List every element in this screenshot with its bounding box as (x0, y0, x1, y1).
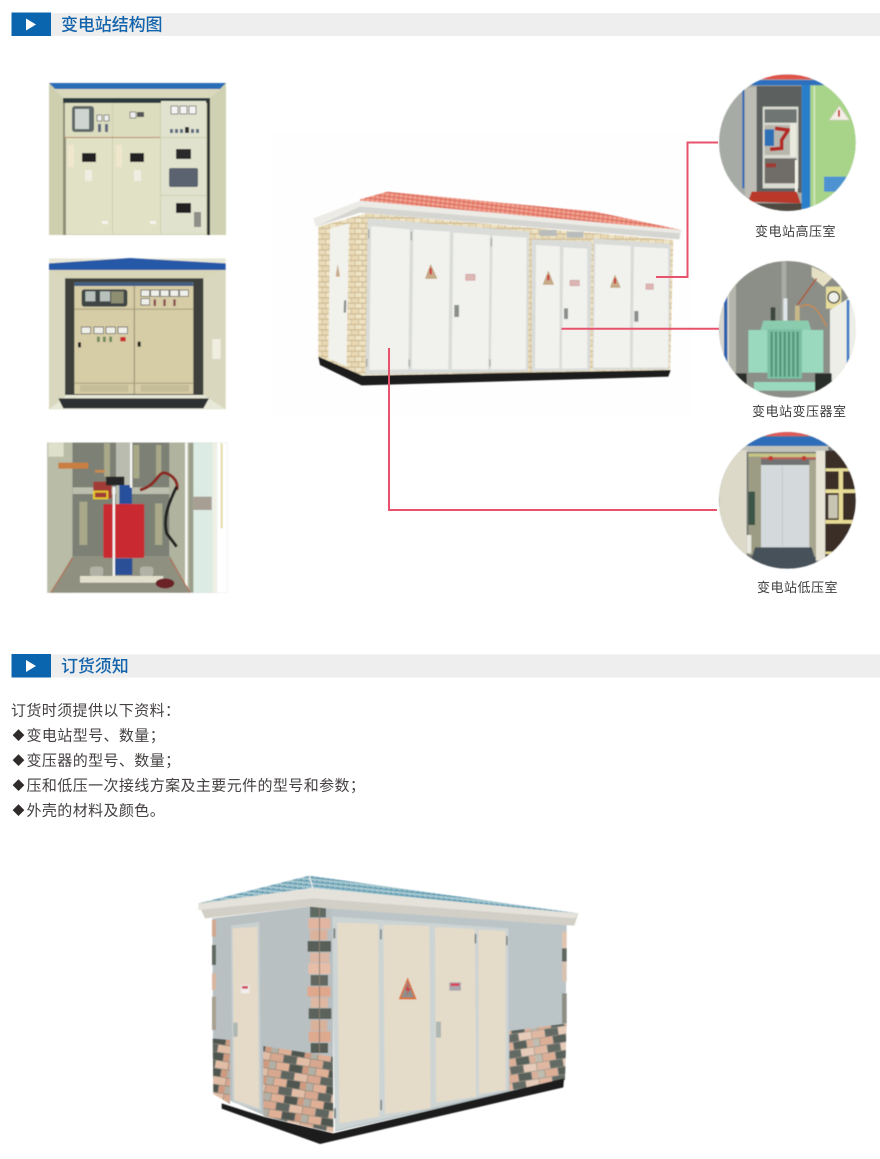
door group C (593, 238, 671, 370)
icon: high voltage warning triangle (399, 977, 417, 999)
text block: ordering requirements: 压和低压一次接线方案及主要元件的型号和参数； (26, 776, 365, 794)
left wall (212, 907, 333, 1132)
roof tiles (198, 876, 578, 913)
leader line: low voltage room (389, 348, 717, 510)
stone corner quoins (212, 907, 567, 1053)
text block: ordering requirements (11, 702, 365, 820)
circle photo: low voltage room (713, 430, 863, 570)
illustration: substation with blue roof and stone corners (198, 876, 578, 1144)
text block: ordering requirements: ◆ (12, 754, 25, 768)
front wall (332, 908, 567, 1132)
section header: ordering notes (12, 654, 880, 678)
door handles (454, 305, 638, 322)
circle photo: high voltage room (713, 73, 863, 213)
leader line: transformer room (562, 328, 719, 330)
roof tiles (360, 192, 682, 230)
door label (449, 982, 461, 991)
door group A (366, 218, 529, 374)
backdrop: faint photo background (272, 132, 692, 417)
icon: warning triangles (426, 265, 620, 287)
text block: ordering requirements: 外壳的材料及颜色。 (26, 802, 165, 820)
icon: header play marker (12, 12, 51, 36)
front wall (365, 213, 673, 375)
concrete base (318, 357, 671, 385)
roof fascia (198, 888, 578, 926)
heading: structure diagram: 变电站结构图 (61, 14, 162, 34)
text block: ordering requirements: ◆ (12, 728, 25, 742)
left wall (318, 213, 367, 376)
leader line: high voltage room (656, 142, 718, 277)
section header: structure diagram (12, 12, 880, 36)
text block: ordering requirements: 订货时须提供以下资料： (11, 702, 180, 720)
left side door (231, 922, 261, 1111)
circle photo: transformer room (713, 260, 863, 400)
roof eave (313, 201, 682, 239)
icon: header play marker (12, 654, 51, 678)
photo: low voltage distribution cabinet (49, 258, 226, 409)
caption: high voltage room: 变电站高压室 (755, 224, 836, 239)
photo: cast resin transformer room (47, 443, 227, 593)
caption: transformer room: 变电站变压器室 (752, 404, 847, 419)
text block: ordering requirements: 变压器的型号、数量； (26, 752, 181, 770)
text block: ordering requirements: ◆ (12, 804, 25, 818)
illustration: substation with red tiled roof (313, 192, 682, 385)
photo: high voltage switchgear cabinet (49, 83, 226, 235)
heading: ordering notes: 订货须知 (61, 657, 129, 676)
door group B (532, 230, 592, 372)
door hinges (366, 229, 492, 367)
concrete base (222, 1078, 564, 1144)
text block: ordering requirements: 变电站型号、数量； (26, 728, 165, 744)
caption: low voltage room: 变电站低压室 (757, 580, 838, 595)
double door set (332, 917, 508, 1130)
left side door (328, 223, 349, 367)
text block: ordering requirements: ◆ (12, 778, 25, 792)
stone wainscot (213, 1023, 567, 1133)
door labels (466, 274, 653, 289)
